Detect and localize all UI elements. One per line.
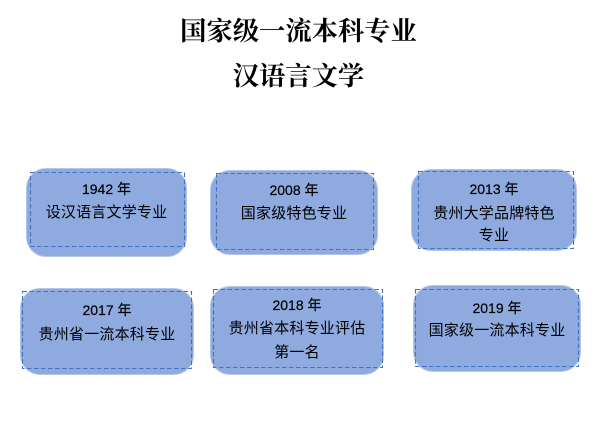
card: 2008: 国家级特色专业 xyxy=(241,205,347,222)
title: 国家级一流本科专业 xyxy=(180,17,417,46)
card: 2017: 贵州省一流本科专业 xyxy=(39,326,175,343)
card: 2013: 贵州大学品牌特色 xyxy=(433,205,555,222)
card: 2018: 贵州省本科专业评估 xyxy=(229,320,365,337)
card: 2017 xyxy=(20,288,194,375)
card: 2018 xyxy=(210,286,384,375)
card: 1942 xyxy=(26,168,187,257)
card: 2019: 2019 年 xyxy=(472,300,522,316)
card: 2017: 2017 年 xyxy=(82,302,132,318)
card: 2013: 专业 xyxy=(479,227,509,244)
card: 2019 xyxy=(413,285,581,372)
card: 1942: 设汉语言文学专业 xyxy=(46,204,167,221)
card: 2013 xyxy=(411,169,577,251)
card: 2013: 2013 年 xyxy=(469,181,519,197)
card: 2018: 2018 年 xyxy=(272,297,322,313)
subtitle: 汉语言文学 xyxy=(233,62,364,91)
card: 2019: 国家级一流本科专业 xyxy=(429,322,565,339)
card: 2018: 第一名 xyxy=(274,344,320,361)
card: 1942: 1942 年 xyxy=(82,181,131,197)
card: 2008: 2008 年 xyxy=(269,182,319,198)
card: 2008 xyxy=(210,170,378,255)
